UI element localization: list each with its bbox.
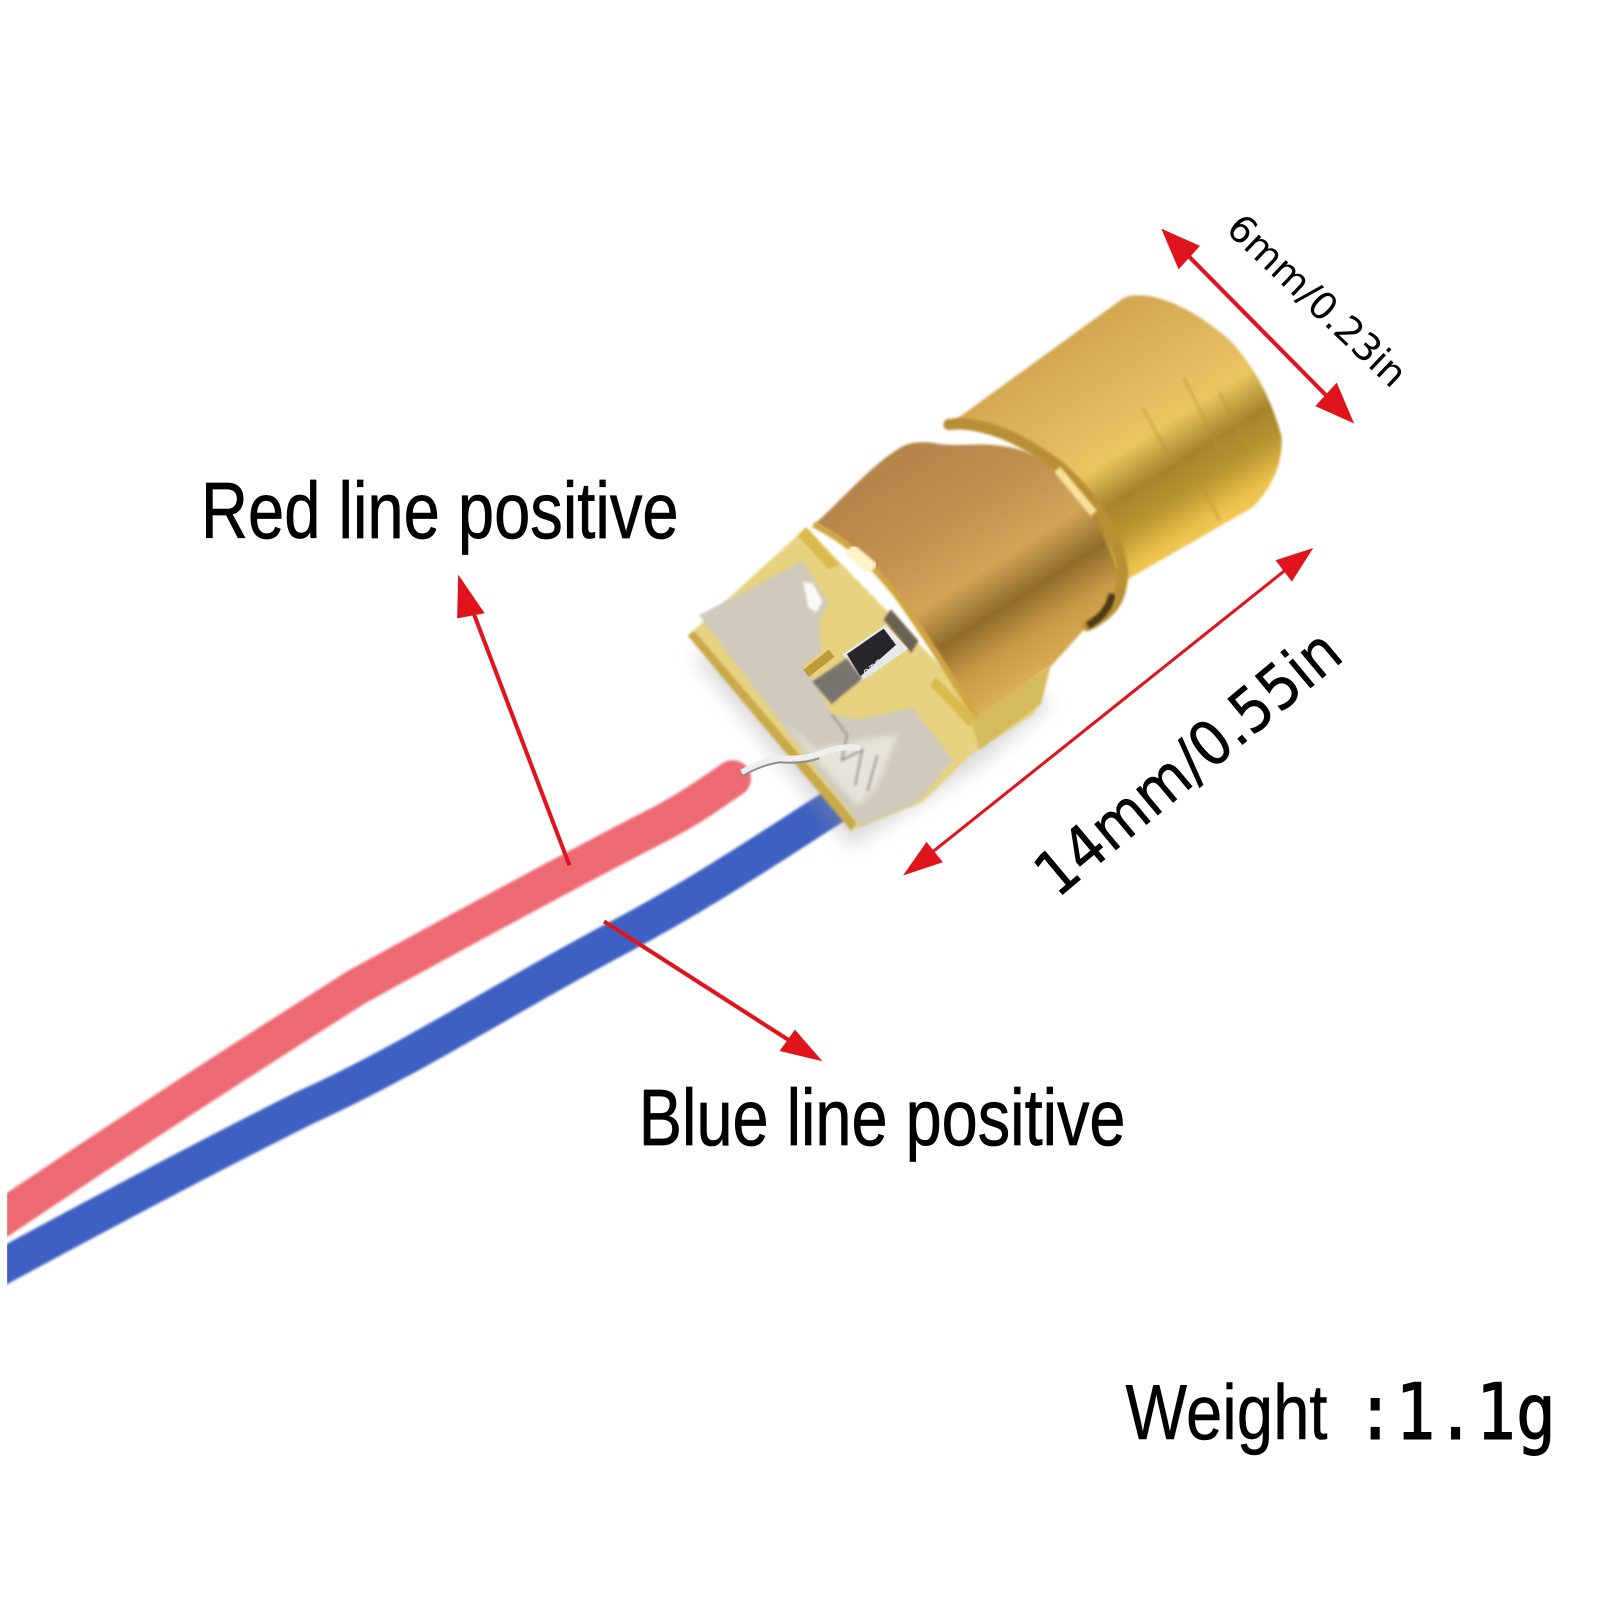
- solder wire lead: [742, 747, 860, 772]
- arrow: blue line pointer: [604, 921, 822, 1061]
- rim tab: [798, 528, 839, 569]
- red wire: [0, 779, 733, 1237]
- rim tab lower: [931, 678, 978, 727]
- brass collar ring: [949, 424, 1122, 626]
- barrel front rim: [813, 524, 976, 716]
- resistor marking: 810: [860, 656, 887, 681]
- solder cracks: [832, 714, 878, 791]
- module shadow: [690, 653, 1051, 847]
- dark slot under barrel: [884, 609, 918, 653]
- label: 14mm dimension: 14mm/0.55in: [1021, 616, 1355, 911]
- lead outline: [742, 758, 819, 777]
- component lead: [806, 653, 832, 673]
- label: weight: Weight: [1126, 1370, 1328, 1456]
- label: 6mm dimension: 6mm/0.23in: [1218, 205, 1416, 396]
- collar dark gap: [1088, 594, 1112, 626]
- label: blue line positive: Blue line positive: [639, 1073, 1126, 1162]
- solder highlights: [781, 719, 898, 806]
- collar highlight: [1057, 469, 1094, 513]
- label: weight: [1126, 1368, 1556, 1458]
- label: weight: :1.1g: [1355, 1368, 1556, 1458]
- arrow: red line pointer: [457, 574, 569, 865]
- blue wire: [0, 798, 847, 1282]
- label: red line positive: Red line positive: [201, 466, 679, 555]
- silver solder pads: [699, 561, 953, 827]
- rear brass barrel: [815, 442, 1122, 716]
- arrow: 14mm dimension: [903, 548, 1313, 876]
- barrel brushed streaks: [1143, 378, 1250, 520]
- front brass barrel: [949, 295, 1282, 582]
- laser module: [688, 295, 1282, 847]
- rim highlight: [849, 549, 873, 569]
- white highlight on pad: [803, 582, 822, 612]
- solder joint: [812, 658, 862, 704]
- smd resistor: [843, 624, 908, 682]
- arrow: 6mm dimension: [1161, 229, 1354, 423]
- circuit board: [688, 528, 1051, 831]
- infographic canvas: [7, 217, 1550, 1456]
